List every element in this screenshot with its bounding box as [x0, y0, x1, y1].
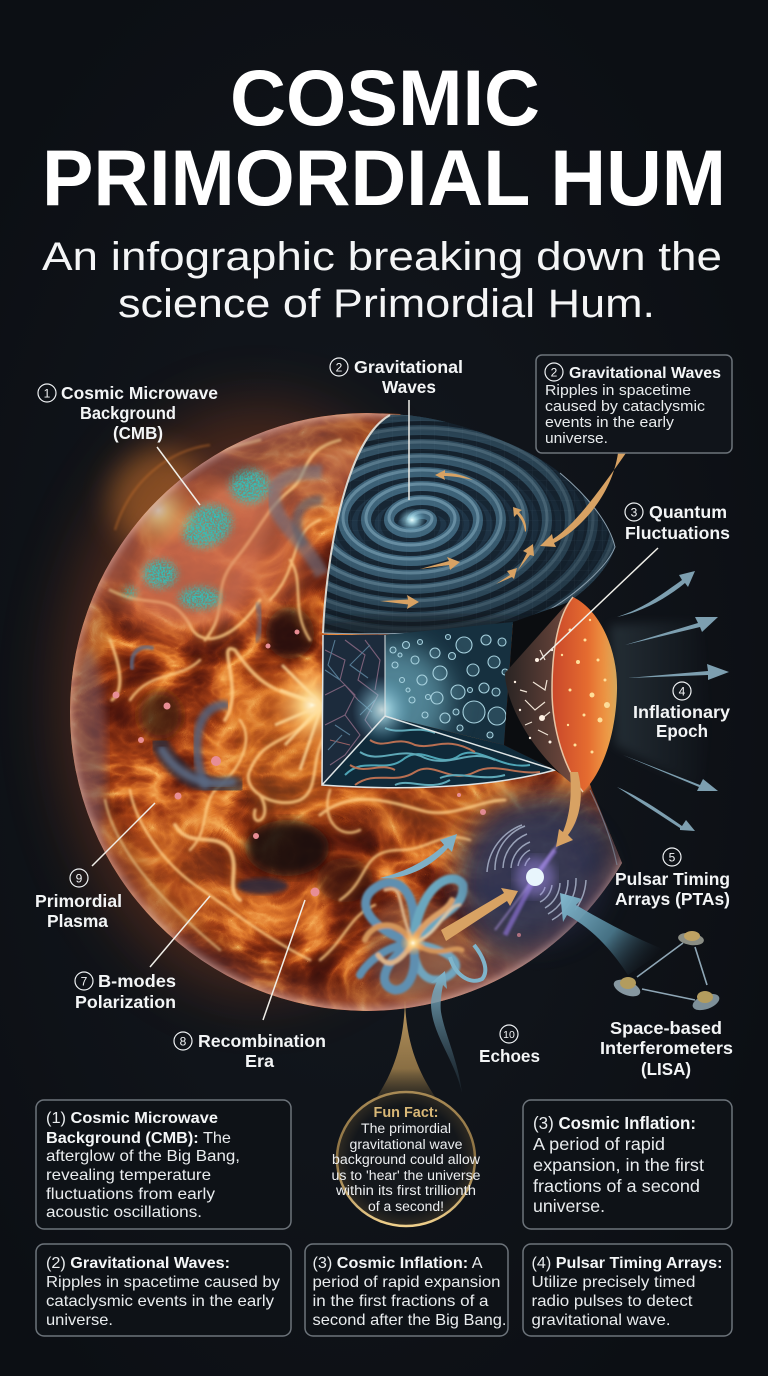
subtitle: An infographic breaking down the	[42, 235, 722, 279]
card: CMB: Background (CMB): The	[46, 1130, 231, 1147]
label: LISA: Space-based	[610, 1018, 722, 1038]
callout: gravitational waves: Gravitational Waves	[569, 365, 721, 382]
label: gravitational waves: Gravitational	[354, 357, 463, 377]
subtitle: science of Primordial Hum.	[118, 282, 655, 326]
pulsar	[465, 812, 605, 942]
spiral ripples	[324, 414, 614, 634]
flame filaments	[105, 440, 505, 960]
mesh grid	[326, 416, 613, 630]
expansion cone	[505, 597, 583, 792]
LISA constellation	[611, 931, 722, 1013]
card: CMB: acoustic oscillations.	[46, 1204, 202, 1221]
title: PRIMORDIAL HUM	[42, 133, 726, 222]
callout: gravitational waves: 2	[551, 366, 558, 380]
flare rays	[275, 665, 322, 770]
upper-left flare	[131, 481, 196, 545]
fun fact: gravitational wave	[350, 1137, 462, 1152]
label: b-modes polarization	[75, 971, 176, 1012]
card: cosmic inflation top: A period of rapid	[533, 1134, 665, 1154]
sphere: primordial plasma	[70, 413, 622, 1011]
card: gravitational waves: cataclysmic events in the early	[46, 1293, 274, 1310]
subtitle	[42, 235, 722, 326]
blue arrow in plasma	[380, 834, 457, 878]
label: pulsar timing arrays: Arrays (PTAs)	[615, 889, 730, 909]
label: echoes	[479, 1025, 540, 1066]
card: cosmic inflation: second after the Big Bang.	[312, 1312, 506, 1329]
label: gravitational waves	[330, 357, 463, 397]
card: cosmic inflation top: (3) Cosmic Inflation:	[533, 1113, 696, 1133]
wave dome	[322, 414, 616, 634]
outer shading	[320, 410, 620, 640]
label: pulsar timing arrays: Pulsar Timing	[615, 869, 730, 889]
title	[42, 53, 726, 222]
label: inflationary epoch	[633, 682, 730, 741]
card: gravitational waves: (2) Gravitational Waves:	[46, 1255, 230, 1272]
leader lines	[92, 400, 658, 1020]
callout: gravitational waves: Ripples in spacetime	[545, 382, 691, 399]
label: echoes: 10	[503, 1029, 515, 1041]
card: gravitational waves: universe.	[46, 1312, 113, 1329]
label: b-modes polarization: 7	[81, 974, 88, 988]
label: recombination era: Era	[245, 1051, 274, 1071]
card: cosmic inflation top	[523, 1100, 732, 1229]
card: CMB: revealing temperature	[46, 1167, 211, 1184]
faint wave rings on sphere	[273, 472, 322, 575]
label: LISA: (LISA)	[641, 1059, 691, 1079]
card: CMB: afterglow of the Big Bang,	[46, 1148, 240, 1165]
swirl to pulsar arrow	[441, 888, 518, 941]
fun fact: Fun Fact:	[374, 1105, 438, 1121]
bright core flare	[274, 661, 322, 748]
label: gravitational waves: 2	[336, 360, 343, 374]
card: pulsar timing arrays: radio pulses to detect	[532, 1293, 693, 1310]
label: b-modes polarization: B-modes	[98, 971, 176, 991]
fun fact	[332, 1000, 480, 1226]
title: COSMIC	[230, 53, 540, 142]
flame glow	[105, 440, 505, 960]
card: gravitational waves: Ripples in spacetime caused by	[46, 1274, 280, 1291]
card: pulsar timing arrays: gravitational wave.	[532, 1312, 670, 1329]
callout: gravitational waves: events in the early	[545, 414, 675, 431]
label: quantum fluctuations: Fluctuations	[625, 523, 730, 543]
cube: cell panel	[386, 622, 513, 745]
fun fact: The primordial	[361, 1121, 451, 1136]
wave arrows	[380, 470, 534, 609]
label: primordial plasma	[35, 869, 122, 931]
card: cosmic inflation top: fractions of a second	[533, 1176, 700, 1196]
CMB patch	[118, 464, 276, 629]
card: pulsar timing arrays: Utilize precisely timed	[532, 1274, 696, 1291]
blue plasma swirl	[132, 605, 261, 786]
inflation lens	[552, 597, 617, 792]
cube: web panel	[322, 635, 385, 785]
swirl vortex	[360, 879, 463, 990]
card: cosmic inflation: (3) Cosmic Inflation: A	[312, 1255, 483, 1272]
card: CMB: (1) Cosmic Microwave	[46, 1110, 218, 1127]
sphere glow	[60, 405, 460, 995]
dark gap	[504, 600, 583, 790]
callout: gravitational waves: caused by cataclysmic	[545, 398, 706, 415]
callout: gravitational waves: universe.	[545, 430, 608, 447]
label: cosmic microwave background: Cosmic Microwave	[61, 383, 218, 403]
card: gravitational waves	[36, 1244, 291, 1336]
label: LISA	[600, 1018, 733, 1079]
fun fact: within its first trillionth	[335, 1183, 476, 1198]
label: quantum fluctuations: Quantum	[649, 502, 727, 522]
label: cosmic microwave background: Background	[80, 403, 176, 423]
card: CMB: fluctuations from early	[46, 1186, 215, 1203]
label: cosmic microwave background	[38, 383, 218, 443]
label: primordial plasma: Primordial	[35, 891, 122, 911]
label: b-modes polarization: Polarization	[75, 992, 176, 1012]
cube: floor panel	[322, 716, 555, 788]
label: primordial plasma: 9	[76, 872, 83, 886]
limb rim	[70, 413, 664, 1011]
LISA beam arrow	[560, 893, 665, 975]
label: primordial plasma: Plasma	[47, 911, 108, 931]
inner lower-right arc	[590, 790, 617, 865]
label: cosmic microwave background: (CMB)	[113, 423, 163, 443]
label: inflationary epoch: Inflationary	[633, 702, 730, 722]
callout arrow	[540, 453, 626, 547]
card: cosmic inflation	[305, 1244, 508, 1336]
label: pulsar timing arrays	[615, 848, 730, 909]
label: gravitational waves: Waves	[382, 377, 436, 397]
card: pulsar timing arrays: (4) Pulsar Timing Arrays:	[532, 1255, 722, 1272]
callout: gravitational waves	[536, 355, 732, 453]
label: recombination era: Recombination	[198, 1031, 326, 1051]
label: cosmic microwave background: 1	[44, 386, 51, 400]
label: recombination era: 8	[180, 1034, 187, 1048]
card: cosmic inflation: period of rapid expansion	[312, 1274, 500, 1291]
label: inflationary epoch: Epoch	[656, 721, 708, 741]
fun fact: background could allow	[332, 1152, 480, 1167]
label: LISA: Interferometers	[600, 1038, 733, 1058]
sphere colour regions	[70, 420, 645, 1007]
card: cosmic inflation top: expansion, in the first	[533, 1155, 704, 1175]
label: quantum fluctuations: 3	[631, 506, 638, 520]
card: cosmic inflation: in the first fractions of a	[312, 1293, 489, 1310]
label: echoes: Echoes	[479, 1046, 540, 1066]
plasma bubbles	[112, 630, 521, 937]
inflation rays	[610, 571, 729, 831]
fun fact: of a second!	[368, 1199, 444, 1214]
card: pulsar timing arrays	[523, 1244, 732, 1336]
label: recombination era	[174, 1031, 326, 1071]
label: quantum fluctuations	[625, 502, 730, 543]
fun fact: us to 'hear' the universe	[332, 1168, 480, 1183]
label: inflationary epoch: 4	[679, 684, 686, 698]
label: pulsar timing arrays: 5	[669, 850, 676, 864]
cube edges	[322, 635, 555, 788]
lens to pulsar arrow	[556, 772, 581, 847]
cube corner glow	[352, 676, 412, 744]
card: cosmic inflation top: universe.	[533, 1196, 605, 1216]
echo arrows	[431, 945, 485, 1093]
card: CMB	[36, 1100, 291, 1229]
